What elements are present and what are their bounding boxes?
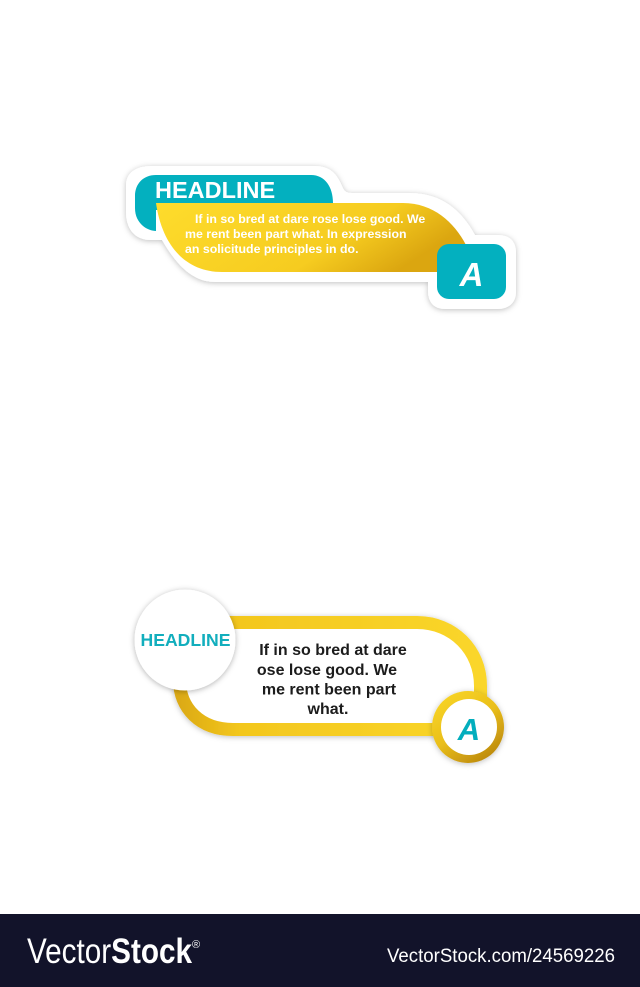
body text: what. (307, 701, 348, 718)
headline circle (134, 590, 236, 690)
headline tab (135, 175, 333, 231)
banner white sticker outline (126, 166, 516, 309)
yellow text panel (156, 203, 466, 272)
badge: circled letter A: A (457, 712, 480, 747)
panel: top banner (126, 166, 516, 309)
logo: VectorStock (27, 932, 192, 971)
yellow text panel: If in so bred at dare rose lose good. We (195, 212, 425, 226)
badge: letter A: A (459, 256, 483, 293)
body text: me rent been part (262, 682, 397, 698)
badge: circled letter A (432, 691, 504, 763)
image id: VectorStock.com/24569226 (387, 945, 615, 967)
footer bar (0, 914, 640, 987)
panel: bottom banner (134, 590, 504, 763)
badge: letter A (437, 244, 506, 299)
body text: If in so bred at dare (259, 642, 407, 659)
yellow text panel: an solicitude principles in do. (185, 242, 359, 256)
headline tab: HEADLINE (155, 177, 275, 203)
yellow text panel: me rent been part what. In expression (185, 227, 407, 241)
body text: ose lose good. We (257, 662, 397, 679)
headline circle: HEADLINE (141, 630, 231, 650)
registered mark: ® (192, 939, 200, 951)
golden outlined frame (180, 622, 480, 730)
